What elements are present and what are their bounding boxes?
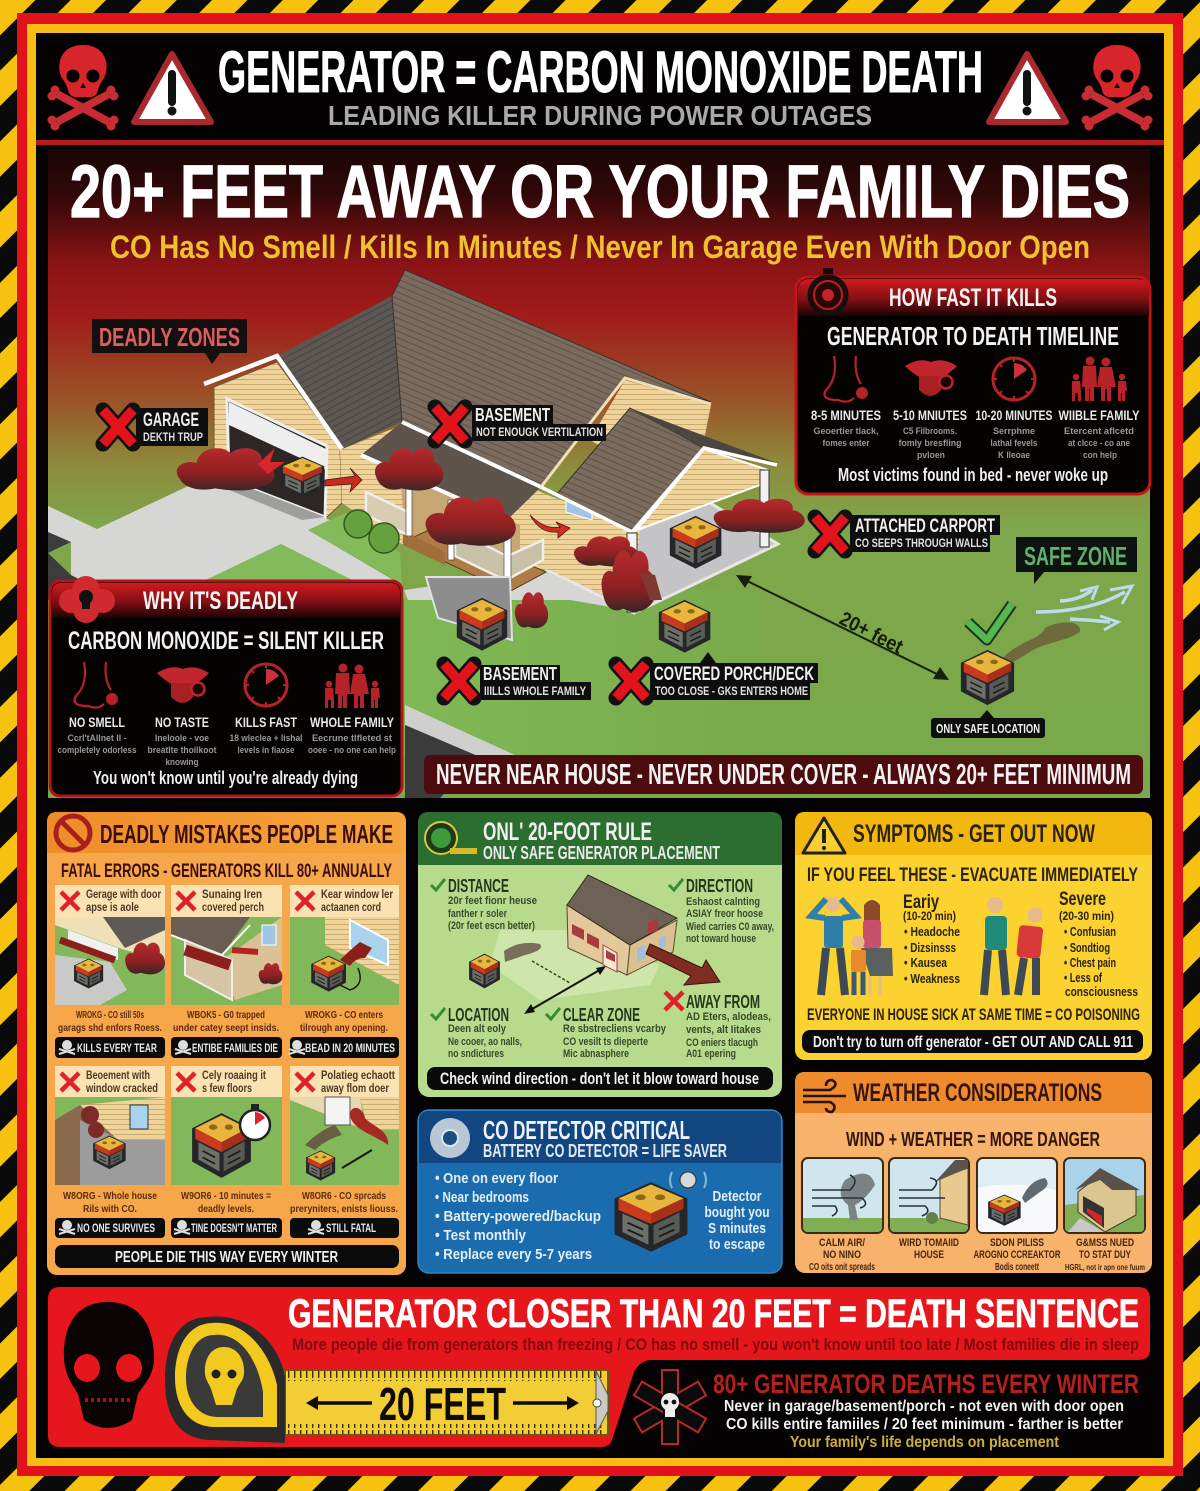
callout: basement ventilation: NOT ENOUGK VERTILATION (476, 425, 603, 439)
icon: star of life (634, 1370, 706, 1444)
mistake card: garage: WROKG - CO still 50s (76, 1009, 144, 1021)
weather card: wind toward house: HOUSE (914, 1249, 944, 1261)
callout: covered porch: COVERED PORCH/DECK (654, 664, 814, 685)
weather card: calm air: CO oits onit spreads (809, 1262, 875, 1273)
timeline descriptions: lathal fevels (990, 438, 1038, 449)
mistake card: running a few hours: TINE DOESN'T MATTER (191, 1223, 277, 1235)
panel subtitle: FATAL ERRORS - GENERATORS KILL 80+ ANNUALLY (61, 861, 392, 882)
weather card: snow piles: Bodis coneett (995, 1262, 1039, 1273)
item: distance (431, 876, 537, 932)
timeline descriptions: K lleoae (998, 450, 1030, 461)
panel heading: WEATHER CONSIDERATIONS (853, 1079, 1102, 1107)
icon: green check mark (968, 604, 1012, 640)
callout: safe zone (1016, 537, 1137, 584)
timeline descriptions: Geoertier tlack, (814, 426, 878, 437)
callout: basement whole family: IIILLS WHOLE FAMILY (484, 684, 586, 698)
label: only safe location (931, 710, 1045, 738)
item: location: no sndictures (448, 1048, 504, 1060)
weather card: garage: G&MSS NUED (1076, 1237, 1134, 1249)
mistake card: basement: Rils with CO. (83, 1203, 137, 1215)
panel: final warning (48, 1287, 1150, 1451)
illustration: generator with detector (615, 1172, 706, 1252)
text: severe symptoms: Severe (1059, 889, 1106, 910)
danger columns: WHOLE FAMILY (310, 714, 395, 730)
checklist: • Near bedrooms (435, 1189, 529, 1206)
timeline descriptions: fomes enter (822, 438, 870, 449)
mistake card: covered porch: ENTIBE FAMILIES DIE (192, 1043, 278, 1055)
checklist: • Replace every 5-7 years (435, 1246, 592, 1263)
checklist: • One on every floor (435, 1170, 558, 1187)
panel footer text: Most victims found in bed - never woke up (838, 465, 1108, 485)
weather card: snow piles: SDON PILISS (990, 1237, 1044, 1249)
panel: why it's deadly (50, 576, 402, 796)
item: location: Ne cooer, ao nalls, (448, 1036, 522, 1048)
mistake card: near window: actaanen cord (321, 900, 381, 914)
item: distance: DISTANCE (448, 876, 509, 896)
danger descriptions: 18 wleclea + lishal (230, 733, 302, 743)
smoke clouds (177, 448, 805, 628)
timeline descriptions: C5 Filbrooms. (903, 426, 957, 437)
text: early symptoms (903, 892, 960, 986)
mistake card: covered porch: Sunaing Iren (202, 887, 262, 901)
mistake card: near window (289, 885, 399, 1058)
item: clear zone (546, 1005, 667, 1060)
callout: detector text: bought you (704, 1204, 770, 1221)
mistake card: garage (55, 885, 165, 1058)
callout: basement ventilation (435, 405, 606, 441)
item: clear zone: Mic abnasphere (563, 1048, 629, 1060)
mistake card: running a few hours: deadly levels. (198, 1203, 254, 1215)
panel: 20-foot rule (418, 812, 782, 1097)
mistake card: garage: Gerage with door (86, 887, 161, 901)
mistake card: basement: W8ORG - Whole house (63, 1190, 157, 1202)
mistake card: pointing exhaust: away flom doer (321, 1081, 389, 1095)
icon: wind arrows (1036, 586, 1132, 630)
panel subtitle: WIND + WEATHER = MORE DANGER (846, 1129, 1100, 1151)
checklist: • Battery-powered/backup (435, 1208, 601, 1225)
mistake card: running a few hours (171, 1066, 282, 1238)
item: distance: (20r feet escn better) (448, 920, 535, 932)
item: direction: Eshaost calnting (686, 896, 760, 908)
panel: CO detector (418, 1110, 782, 1273)
danger descriptions: breatlte thoilkoot (148, 745, 216, 755)
mistake card: garage: garags shd enfors Roess. (58, 1022, 162, 1034)
weather card: wind toward house (889, 1158, 969, 1261)
mistake card: near window: Kear window ler (321, 887, 393, 901)
danger icons (74, 662, 380, 708)
illustration: early symptoms family (811, 896, 893, 995)
icon: red skull left (48, 45, 118, 130)
danger descriptions: Ineloole - voe (155, 733, 209, 743)
illustration: house with attached garage and carport (204, 270, 778, 640)
weather card: calm air (802, 1158, 883, 1273)
weather card: garage (1064, 1158, 1145, 1272)
header banner (48, 40, 1152, 131)
stat text: Never in garage/basement/porch - not even with door open (724, 1398, 1124, 1415)
panel footer text: You won't know until you're already dying (93, 768, 358, 788)
text: early symptoms: • Kausea (904, 955, 948, 970)
panel: symptoms (795, 812, 1152, 1060)
text: early symptoms: • Headoche (904, 924, 960, 939)
timeline icons (824, 356, 1127, 402)
label: only safe location: ONLY SAFE LOCATION (936, 721, 1040, 736)
item: away from: vents, alt Iitakes (686, 1024, 761, 1036)
icon: green check mark inner (968, 604, 1012, 640)
callout: garage: DEKTH TRUP (143, 430, 203, 444)
mistake card: near window: BEAD IN 20 MINUTES (305, 1043, 395, 1055)
footer bar: PEOPLE DIE THIS WAY EVERY WINTER (115, 1249, 338, 1266)
item: direction (669, 876, 774, 945)
stat text (724, 1398, 1124, 1451)
mistake card: basement: Beoement with (86, 1068, 150, 1082)
item: location (431, 1005, 522, 1060)
danger descriptions: ooee - no one can help (308, 745, 396, 755)
item: clear zone: CLEAR ZONE (563, 1005, 640, 1025)
panel subtitle: CARBON MONOXIDE = SILENT KILLER (68, 627, 384, 655)
icon: big black skull (64, 1302, 154, 1428)
timeline descriptions (814, 426, 1134, 461)
callout: detector text: to escape (709, 1236, 765, 1253)
callout: basement whole family: BASEMENT (483, 664, 557, 684)
illustration: severe symptoms adults (984, 897, 1043, 995)
weather card: calm air: CALM AIR/ (819, 1237, 865, 1249)
footer bar (427, 1067, 773, 1090)
weather card: wind toward house: WIRD TOMAIID (899, 1237, 959, 1249)
text: early symptoms: • Dizsinsss (904, 940, 956, 955)
item: away from: CO eniers tlacugh (686, 1037, 758, 1049)
icon: warning triangle left (134, 54, 211, 122)
item: direction: not toward house (686, 933, 756, 945)
text: early symptoms: • Weakness (904, 971, 960, 986)
weather card: garage: TO STAT DUY (1079, 1249, 1131, 1261)
weather card: snow piles (974, 1158, 1061, 1273)
mistake card: near window: WROKG - CO enters (305, 1009, 383, 1021)
text: severe symptoms: • Confusian (1064, 924, 1116, 939)
timeline descriptions: Serrphme (993, 426, 1035, 437)
callout: deadly zones (92, 319, 247, 364)
callout: attached carport: CO SEEPS THROUGH WALLS (855, 536, 988, 550)
illustration: house placement (469, 875, 720, 1014)
mistake card: near window: tilrough any opening. (300, 1022, 388, 1034)
danger descriptions: Eecrune tlfleted st (312, 733, 392, 743)
text: early symptoms: Eariy (903, 892, 939, 913)
mistake card: basement: window cracked (85, 1081, 158, 1095)
text: severe symptoms: (20-30 min) (1059, 909, 1114, 923)
mistake card: pointing exhaust (290, 1066, 399, 1238)
timeline descriptions: at cIcce - co ane (1068, 438, 1130, 449)
item: location: Deen alt eoly (448, 1023, 507, 1035)
danger columns (69, 714, 395, 730)
footer bar: Check wind direction - don't let it blow toward house (440, 1069, 759, 1088)
mistake card: covered porch: under catey seept insids. (173, 1022, 279, 1034)
timeline descriptions: pvloen (917, 450, 945, 461)
callout: basement ventilation: BASEMENT (475, 405, 550, 425)
danger descriptions: Ccrl'tAllnet II - (68, 733, 126, 743)
callout: detector text: S minutes (708, 1220, 766, 1237)
subtitle: LEADING KILLER DURING POWER OUTAGES (328, 100, 872, 131)
weather card: garage: HGRL, not ir apn one fuum (1065, 1263, 1145, 1272)
icon: toxic cloud skull (59, 576, 115, 623)
icon: smoke detector (430, 1118, 470, 1158)
danger columns: NO TASTE (155, 714, 209, 730)
timeline columns: 5-10 MNIUTES (893, 407, 967, 423)
panel: deadly mistakes (47, 812, 406, 1275)
stat text: Your family's life depends on placement (790, 1434, 1060, 1451)
panel heading: WHY IT'S DEADLY (143, 587, 298, 615)
footer bar (802, 1030, 1143, 1053)
danger columns: NO SMELL (69, 714, 125, 730)
panel: how fast it kills (796, 268, 1150, 494)
mistake card: running a few hours: Cely roaaing it (202, 1068, 266, 1082)
danger descriptions: completely odorless (58, 745, 136, 755)
item: distance: 20r feet fionr heuse (448, 895, 537, 907)
item: location: LOCATION (448, 1005, 509, 1025)
item: away from: AD Eters, alodeas, (686, 1011, 771, 1023)
panel: main scene (48, 149, 1150, 798)
timeline columns (811, 407, 1140, 423)
callout: deadly zones: DEADLY ZONES (99, 322, 240, 352)
text: severe symptoms (1059, 889, 1138, 999)
danger descriptions: knowing (166, 757, 198, 767)
checklist (435, 1170, 601, 1263)
icon: warning triangle (803, 818, 845, 853)
footer bar (55, 1245, 399, 1268)
callout: garage: GARAGE (143, 410, 199, 431)
timeline descriptions: Etercent aflcetd (1064, 426, 1134, 437)
item: away from: AWAY FROM (686, 992, 760, 1012)
icon: no symbol (56, 816, 90, 850)
mistake card: pointing exhaust: STILL FATAL (326, 1223, 376, 1235)
item: away from (665, 992, 771, 1060)
callout: covered porch (616, 652, 818, 700)
mistake card: covered porch (171, 885, 282, 1058)
item: direction: ASIAY freor hoose (686, 908, 763, 920)
mistake card: garage: apse is aole (86, 900, 139, 914)
icon: stopwatch (809, 268, 847, 314)
text: severe symptoms: • Less of (1064, 970, 1102, 985)
icon: red skull right (1082, 45, 1152, 130)
mistake card: covered porch: covered perch (202, 900, 264, 914)
item: away from: A01 epering (686, 1048, 736, 1060)
panel heading: SYMPTOMS - GET OUT NOW (853, 820, 1095, 848)
mistake card: pointing exhaust: preryniters, enists liouss. (290, 1203, 398, 1215)
item: direction: DIRECTION (686, 876, 753, 896)
panel: weather considerations (795, 1072, 1152, 1273)
ground: driveway and lawn (48, 480, 760, 798)
callout: covered porch: TOO CLOSE - GKS ENTERS HOME (655, 684, 808, 698)
safe generator with exhaust (961, 622, 1080, 705)
text: severe symptoms: • Sondtiog (1064, 940, 1110, 955)
distance arrow 20+ feet (736, 575, 949, 680)
timeline descriptions: con help (1083, 450, 1117, 461)
timeline columns: WIIBLE FAMILY (1058, 407, 1140, 423)
mistake card: pointing exhaust: Polatieg echaott (321, 1068, 395, 1082)
callout: safe zone: SAFE ZONE (1024, 541, 1127, 571)
panel subtitle: ONLY SAFE GENERATOR PLACEMENT (483, 843, 720, 863)
mistake card: basement (55, 1066, 165, 1238)
callout: basement whole family (444, 664, 591, 700)
panel heading: HOW FAST IT KILLS (889, 284, 1057, 312)
mistake card: pointing exhaust: W8OR6 - CO sprcads (302, 1190, 386, 1202)
distance arrow 20+ feet: 20+ feet (836, 608, 907, 658)
timeline columns: 10-20 MINUTES (976, 407, 1052, 423)
icon: warning triangle right (989, 54, 1066, 122)
panel heading: DEADLY MISTAKES PEOPLE MAKE (100, 819, 393, 849)
panel heading: CO DETECTOR CRITICAL (483, 1115, 690, 1145)
callout: detector text: Detector (712, 1188, 762, 1205)
mistake card: running a few hours: W9OR6 - 10 minutes = (181, 1190, 271, 1202)
weather card: calm air: NO NINO (823, 1249, 861, 1261)
danger descriptions (58, 733, 396, 767)
mistake card: basement: NO ONE SURVIVES (77, 1223, 155, 1235)
timeline descriptions: fomly bresfling (898, 438, 962, 449)
text: severe symptoms: consciousness (1065, 985, 1138, 999)
item: clear zone: CO vesilt ts dieperte (563, 1036, 648, 1048)
tape label: 20 feet: 20 FEET (379, 1378, 506, 1430)
item: distance: fanther r soler (448, 908, 508, 920)
panel subtitle: BATTERY CO DETECTOR = LIFE SAVER (483, 1141, 727, 1161)
callout: attached carport: ATTACHED CARPORT (855, 516, 995, 537)
item: clear zone: Re sbstrecliens vcarby (563, 1023, 667, 1035)
danger descriptions: levels in fiaose (238, 745, 294, 755)
stat text: CO kills entire famiiles / 20 feet minimum - farther is better (726, 1416, 1123, 1433)
callout: attached carport (815, 515, 1000, 552)
mistake card: covered porch: WBOK5 - G0 trapped (187, 1009, 265, 1021)
weather card: snow piles: AROGNO CCREAKTOR (974, 1249, 1061, 1261)
mistake card: running a few hours: s few floors (202, 1081, 252, 1095)
danger columns: KILLS FAST (235, 714, 297, 730)
mistake card: garage: KILLS EVERY TEAR (77, 1043, 157, 1055)
checklist: • Test monthly (435, 1227, 527, 1244)
timeline columns: 8-5 MINUTES (811, 407, 881, 423)
icon: tape measure (425, 822, 477, 854)
panel heading: ONL' 20-FOOT RULE (483, 818, 652, 846)
callout: garage (103, 408, 208, 446)
callout: detector text (704, 1188, 770, 1253)
icon: tape measure (165, 1316, 608, 1443)
text: severe symptoms: • Chest pain (1064, 955, 1116, 970)
generators in danger zones (281, 457, 721, 653)
item: direction: Wied carries C0 away, (686, 921, 774, 933)
tape label: 20 feet (306, 1378, 579, 1430)
icon: wind (803, 1080, 846, 1112)
text: early symptoms: (10-20 min) (903, 909, 956, 923)
